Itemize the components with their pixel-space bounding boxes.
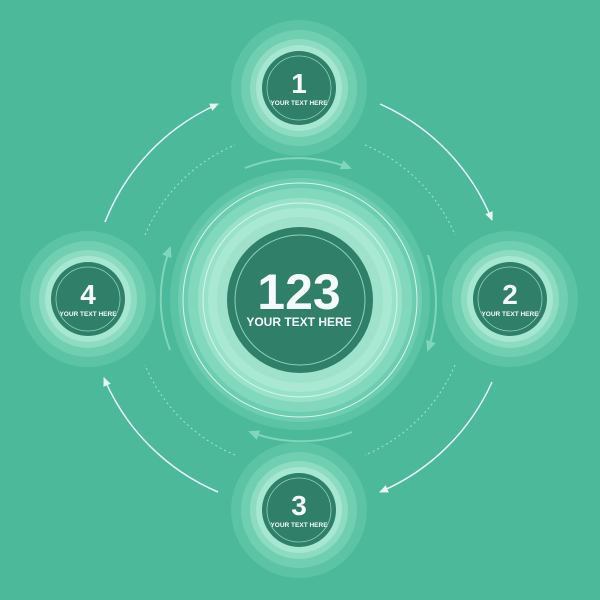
center circle bbox=[227, 227, 373, 373]
node 1 bbox=[231, 20, 367, 156]
node 1: 1 bbox=[291, 68, 307, 99]
central ring group: YOUR TEXT HERE bbox=[246, 315, 352, 329]
central ring group bbox=[161, 158, 436, 441]
node 2: YOUR TEXT HERE bbox=[481, 311, 539, 318]
node 4 bbox=[20, 231, 156, 367]
node 4: YOUR TEXT HERE bbox=[59, 311, 117, 318]
node 4: 4 bbox=[80, 279, 96, 310]
node 3: 3 bbox=[291, 490, 307, 521]
node 2 bbox=[442, 231, 578, 367]
inner arrows bbox=[161, 158, 436, 441]
node 3: YOUR TEXT HERE bbox=[270, 522, 328, 529]
dotted arcs bbox=[145, 145, 455, 455]
node 2: 2 bbox=[502, 279, 518, 310]
node 3 bbox=[231, 442, 367, 578]
outer arrows bbox=[104, 104, 492, 492]
node 1: YOUR TEXT HERE bbox=[270, 100, 328, 107]
central ring group: 123 bbox=[257, 264, 341, 320]
